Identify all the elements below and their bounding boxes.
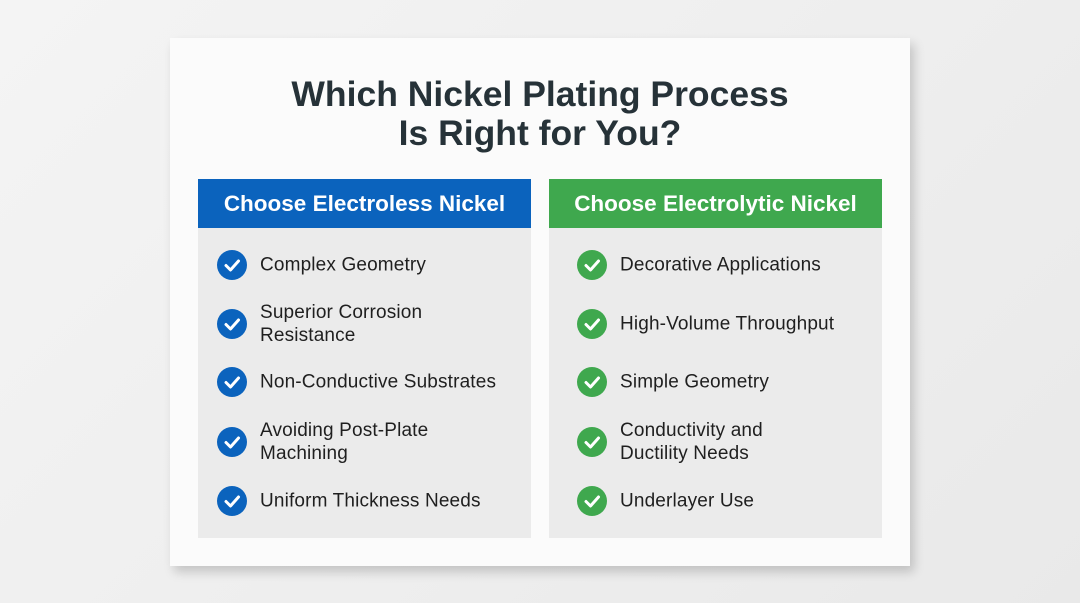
item: uniform: Uniform Thickness Needs	[260, 490, 481, 512]
item: machining: Machining	[260, 443, 348, 464]
header: electrolytic: Choose Electrolytic Nickel	[574, 191, 857, 216]
item: conductivity: Ductility Needs	[620, 443, 749, 464]
title	[291, 74, 789, 153]
item: underlayer: Underlayer Use	[620, 490, 754, 512]
item: underlayer	[577, 486, 754, 516]
item: conductivity	[577, 420, 763, 464]
header: electroless	[198, 179, 531, 228]
title: Is Right for You?	[399, 113, 681, 153]
item: complex geometry	[217, 250, 426, 280]
header: electrolytic	[549, 179, 882, 228]
item: corrosion: Superior Corrosion	[260, 302, 422, 323]
item: machining: Avoiding Post-Plate	[260, 420, 428, 441]
item: simple geometry: Simple Geometry	[620, 372, 769, 392]
panel: electroless	[198, 179, 531, 538]
item: non-conductive: Non-Conductive Substrates	[260, 372, 496, 392]
item: conductivity: Conductivity and	[620, 420, 763, 441]
panel: electrolytic	[549, 179, 882, 538]
title: Which Nickel Plating Process	[291, 74, 789, 114]
item: throughput: High-Volume Throughput	[620, 314, 834, 334]
item: uniform	[217, 486, 481, 516]
item: simple geometry	[577, 367, 769, 397]
item: decorative: Decorative Applications	[620, 254, 821, 276]
item: corrosion	[217, 302, 422, 346]
item: complex geometry: Complex Geometry	[260, 254, 426, 276]
item: throughput	[577, 309, 834, 339]
item: non-conductive	[217, 367, 496, 397]
item: decorative	[577, 250, 821, 280]
item: machining	[217, 420, 428, 464]
item: corrosion: Resistance	[260, 325, 356, 346]
header: electroless: Choose Electroless Nickel	[224, 191, 505, 216]
card	[170, 38, 910, 566]
